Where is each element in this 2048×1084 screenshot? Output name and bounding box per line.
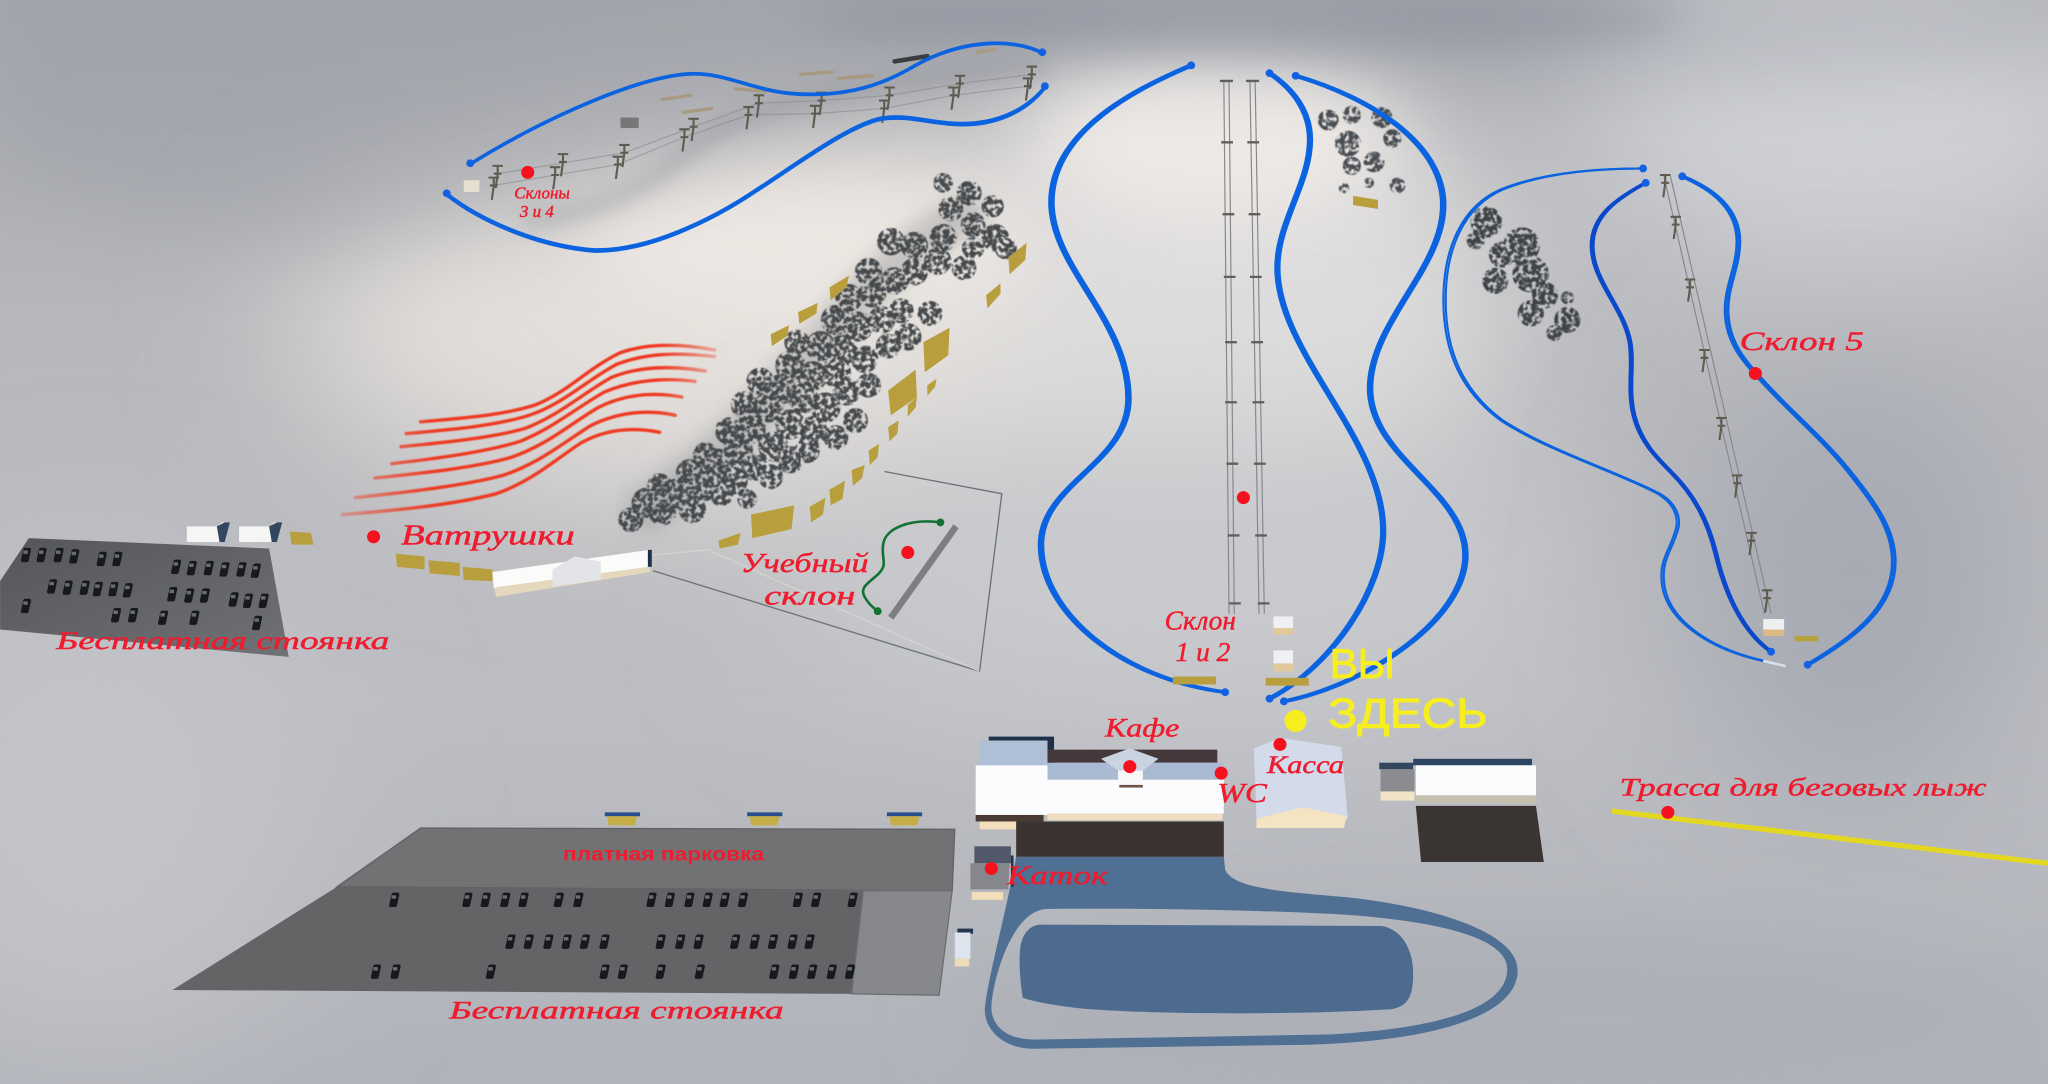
building: skating rink hut [970,846,1014,900]
paid parking area [337,828,955,891]
chairlift: slopes 3 and 4 [464,50,1037,200]
piste: slope 5 right [1681,176,1895,665]
panel: main slopes 1 and 2 [1039,61,1467,705]
training slope piste [863,521,940,611]
marker: ticket office [1273,738,1287,751]
retaining walls along tree belt [396,196,1378,581]
panel: skating rink loop [985,857,1518,1049]
piste: slope B [1268,73,1385,699]
free parking area [172,887,863,994]
piste outline: upper slope 3 [470,43,1042,165]
building: small kiosk [955,929,973,966]
building: ticket office [1254,738,1348,828]
training slope end points [874,518,944,615]
building: right hall [1379,759,1544,862]
label: you are here: ВЫ [1330,640,1395,687]
marker: ski trail [1661,806,1674,819]
tree clump between slopes 2 [1318,106,1405,193]
piste: slope A [1039,65,1227,692]
entrance signs [605,812,922,825]
building: main lodge with cafe [1048,748,1224,820]
piste: slope 5 outer [1443,168,1764,661]
label: skating rink: Каток [1006,861,1109,890]
chairlift 2 [1246,81,1270,614]
tubing huts [187,522,314,545]
chairlift 5 [1660,175,1772,614]
label: slopes 3 and 4: 3 и 4 [519,202,554,221]
finish stripe [1763,661,1785,666]
training area boundary [653,471,1002,671]
training area path [653,550,980,671]
tree belt beside the tubing [622,176,1014,529]
marker: you are here [1285,710,1307,732]
parked cars: left lot [20,548,269,630]
parking surface [0,538,289,657]
chairlift 1 [1220,81,1241,614]
marker: tubing [367,530,380,543]
panel: paid and free parking [172,812,955,1025]
label: training slope: склон [764,581,856,611]
marker: training slope [901,546,914,559]
training slope lift bar [891,526,956,618]
label: tubing: Ватрушки [401,520,575,552]
building: tubing lodge [492,550,652,597]
marker: WC [1215,767,1228,780]
skating rink [1020,925,1413,1013]
panel: slope 5 [1443,165,1895,669]
panel: tubing runs [187,345,714,552]
lift huts [1273,616,1293,671]
shadow loop road [985,857,1518,1049]
unused lot strip [852,891,952,995]
label: paid parking: платная парковка [563,845,765,866]
label: ski trail: Трасса для беговых лыж [1620,774,1987,801]
piste end points: main slopes [1187,61,1300,705]
shaded base under tree belt [647,215,967,509]
label: free parking bottom: Бесплатная стоянка [448,998,784,1025]
panel: central buildings [955,714,1544,966]
label: ticket office: Касса [1266,752,1344,779]
callout: you are here [1285,640,1488,736]
panel: slopes 3 and 4 [443,43,1049,252]
label: slope 5: Склон 5 [1740,327,1864,356]
ticket signs [1173,677,1309,686]
piste end points: slopes 3 and 4 [443,48,1049,197]
label: cafe: Кафе [1104,714,1179,743]
marker: skating rink [985,862,998,875]
label: training slope: Учебный [741,548,869,578]
panel: free parking left [0,538,389,657]
label: you are here: ЗДЕСЬ [1328,689,1488,736]
tree clump by slope 5 [1467,206,1580,341]
panel: training slope [653,471,1002,671]
tubing lanes [342,345,714,515]
marker: slopes 3 and 4 [521,166,534,179]
label: WC: WC [1217,778,1268,808]
piste end points: slope 5 [1639,165,1812,669]
building shadow [1016,821,1224,857]
lift hut slope 5 [1763,619,1818,641]
marker: slope 5 [1749,367,1762,380]
panel: cross-country ski trail [1612,774,2048,863]
piste: slope 5 middle [1591,183,1772,652]
label: slopes 3 and 4: Склоны [514,184,570,203]
label: slopes 1 and 2: Склон [1165,606,1236,636]
label: slopes 1 and 2: 1 и 2 [1176,637,1231,667]
ski trail line [1612,811,2048,863]
building: main lodge left wing [976,737,1054,829]
piste outline: lower slope 4 [447,86,1045,252]
label: free parking left: Бесплатная стоянка [55,628,389,655]
parked cars: main lot [371,893,858,979]
piste: slope C [1282,76,1467,701]
marker: cafe [1123,760,1136,773]
marker: slopes 1 and 2 [1237,491,1250,504]
